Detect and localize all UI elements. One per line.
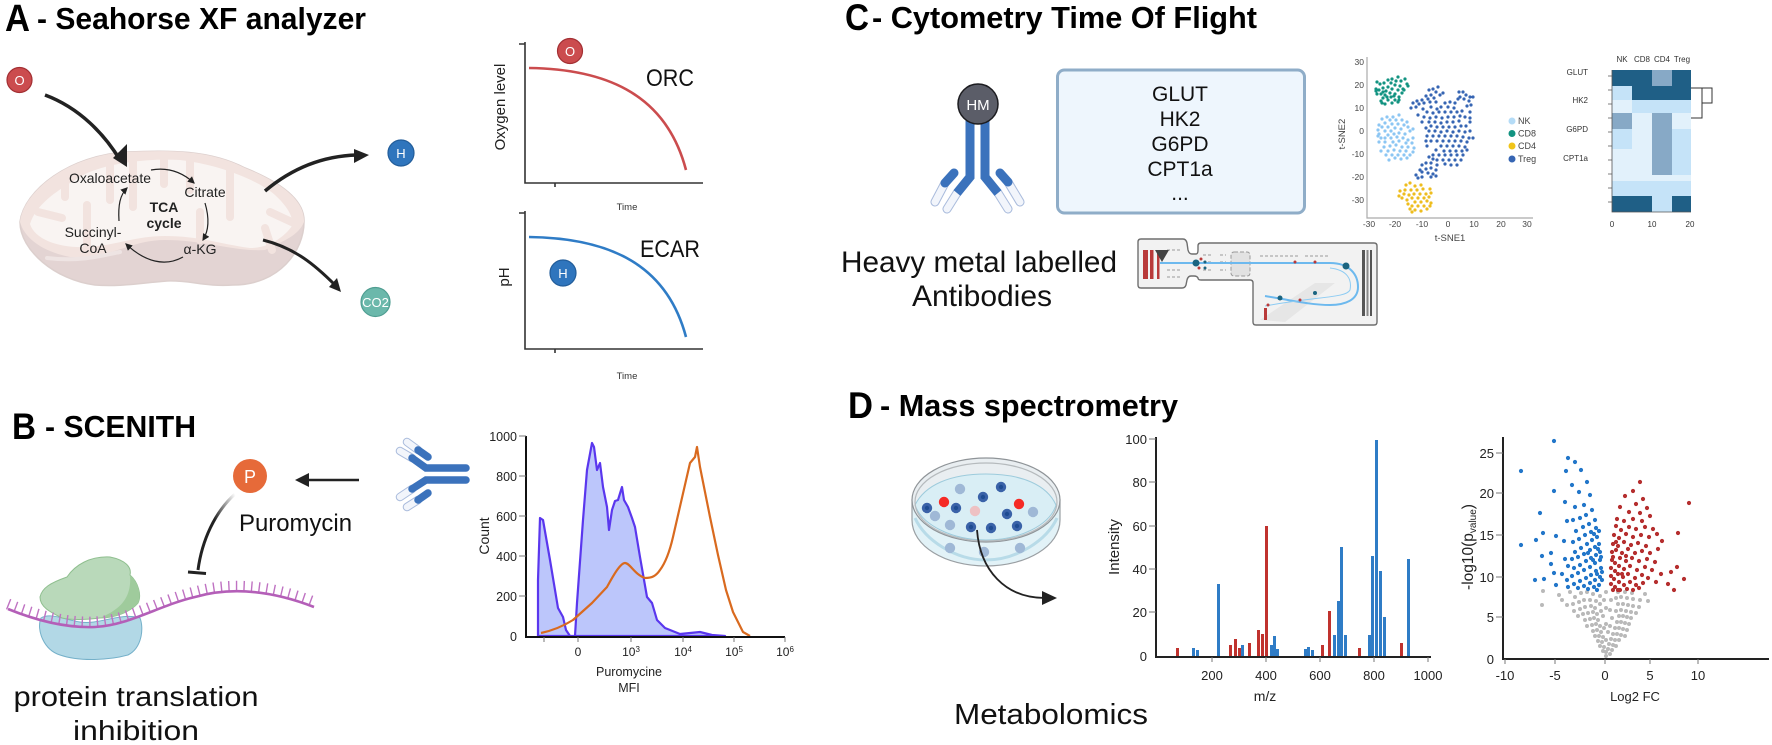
icon: ribosome on mRNA [8, 557, 314, 660]
chart: volcano plot: 5 [1487, 610, 1494, 625]
heading D: - Mass spectrometry [880, 388, 1179, 423]
dots: downregulated [1521, 441, 1602, 590]
chart: volcano plot: -5 [1549, 668, 1561, 683]
chart: mass spectrum: 40 [1133, 562, 1147, 577]
chart: t-SNE scatter: 0 [1446, 219, 1451, 229]
label: heavy metal labelled antibodies: Heavy metal labelled [841, 246, 1117, 279]
heading A: - Seahorse XF analyzer [37, 1, 366, 36]
chart: puromycin MFI histogram: 10 [725, 645, 738, 659]
marker list box: G6PD [1151, 133, 1209, 156]
chart: puromycin MFI histogram: Puromycine [596, 665, 662, 679]
arrow: CO2 out [263, 240, 341, 292]
icon: oxygen molecule [7, 68, 32, 92]
marker list box: HK2 [1160, 108, 1200, 131]
chart: volcano plot: 15 [1480, 528, 1494, 543]
arrow: oxygen into mitochondrion [45, 95, 127, 167]
chart: t-SNE scatter: -20 [1352, 172, 1364, 182]
legend: t-SNE populations: CD8 [1518, 128, 1536, 138]
chart: oxygen level over time [492, 38, 703, 213]
chart: t-SNE scatter: 30 [1355, 57, 1364, 67]
chart: t-SNE scatter: 0 [1359, 126, 1364, 136]
TCA cycle labels and arrows: cycle [146, 215, 182, 231]
chart: marker heatmap: G6PD [1566, 125, 1588, 134]
chart: puromycin MFI histogram: 3 [635, 645, 640, 654]
chart: pH over time [496, 211, 703, 382]
dots: NK cluster [1378, 115, 1414, 160]
icon: CyTOF instrument [1138, 229, 1377, 325]
TCA cycle labels and arrows: Oxaloacetate [69, 170, 151, 186]
chart: mass spectrum: 0 [1140, 649, 1147, 664]
icon: puromycin: P [244, 467, 256, 487]
icon: heavy metal labelled antibody: HM [966, 97, 990, 114]
chart: pH over time: Time [617, 371, 637, 382]
panel C: Cytometry Time Of Flight [841, 0, 1712, 325]
panel A: Seahorse XF analyzer [5, 0, 703, 382]
chart: puromycin MFI histogram: 10 [776, 645, 789, 659]
chart: puromycin MFI histogram: Count [476, 517, 492, 555]
chart: volcano plot: value [1468, 509, 1479, 533]
heading D: D [848, 385, 873, 426]
chart: oxygen level over time: ORC [646, 65, 694, 92]
chart: t-SNE scatter: 10 [1469, 219, 1479, 229]
panel B: SCENITH [8, 406, 794, 745]
chart: t-SNE scatter: 20 [1355, 80, 1364, 90]
chart: mass spectrum: 600 [1309, 668, 1331, 683]
dots: not significant [1542, 591, 1648, 656]
label: heavy metal labelled antibodies [841, 246, 1117, 313]
chart: marker heatmap: GLUT [1567, 68, 1588, 77]
icon: puromycin [233, 459, 267, 493]
chart: mass spectrum: 400 [1255, 668, 1277, 683]
chart: volcano plot: 25 [1480, 446, 1494, 461]
chart: t-SNE scatter: -10 [1352, 149, 1364, 159]
heading B: B [12, 406, 36, 447]
chart: t-SNE scatter: t-SNE1 [1435, 233, 1465, 244]
marker list box: GLUT [1152, 83, 1208, 106]
legend: t-SNE populations: Treg [1518, 154, 1536, 164]
chart: puromycin MFI histogram: 0 [575, 645, 582, 659]
chart: mass spectrum: m/z [1254, 688, 1276, 704]
panel D: Mass spectrometry [848, 385, 1769, 731]
icon: antibody [400, 442, 466, 507]
chart: volcano plot: 0 [1601, 668, 1609, 683]
label: protein translation inhibition: protein translation [14, 681, 258, 712]
icon: CO2 [361, 288, 390, 316]
chart: puromycin MFI histogram: 4 [687, 645, 692, 654]
TCA cycle labels and arrows: Citrate [184, 184, 226, 200]
chart: puromycin MFI histogram: MFI [618, 681, 640, 695]
chart: t-SNE scatter: -30 [1363, 219, 1375, 229]
chart: marker heatmap: CD4 [1654, 55, 1671, 64]
inhibition arrow [188, 494, 235, 574]
chart: mass spectrum: 1000 [1414, 668, 1442, 683]
chart: t-SNE scatter: -30 [1352, 195, 1364, 205]
chart: volcano plot: 10 [1480, 570, 1494, 585]
chart: t-SNE scatter: -10 [1416, 219, 1428, 229]
label: protein translation inhibition [14, 681, 258, 745]
chart: volcano plot: Log2 FC [1610, 689, 1660, 704]
heading B [12, 406, 196, 447]
chart: mass spectrum [1106, 432, 1442, 704]
heading C: - Cytometry Time Of Flight [872, 0, 1257, 35]
icon: CO2: CO2 [362, 295, 389, 310]
chart: puromycin MFI histogram: 600 [496, 510, 517, 524]
dots: CD8 cluster [1376, 77, 1408, 104]
marker list box: CPT1a [1147, 158, 1213, 181]
arrow: antibody to puromycin [295, 473, 359, 487]
chart: marker heatmap: NK [1616, 55, 1628, 64]
chart: volcano plot: 5 [1646, 668, 1654, 683]
chart: pH over time: ECAR [640, 236, 700, 263]
icon: proton: H [396, 146, 406, 161]
chart: volcano plot: ) [1460, 504, 1477, 509]
chart: marker heatmap: CD8 [1634, 55, 1651, 64]
dots: Treg cluster [1411, 87, 1473, 178]
chart: puromycin MFI histogram: 10 [622, 645, 635, 659]
dots: CD4 cluster [1399, 183, 1431, 212]
label: metabolomics: Metabolomics [954, 699, 1148, 731]
chart: marker heatmap: HK2 [1572, 96, 1589, 105]
chart: t-SNE scatter: t-SNE2 [1337, 119, 1348, 149]
chart: oxygen level over time: Oxygen level [492, 64, 509, 150]
chart: puromycin MFI histogram: 800 [496, 470, 517, 484]
icon: petri dish with cells [912, 458, 1060, 566]
TCA cycle labels and arrows: α-KG [184, 241, 216, 257]
chart: mass spectrum: 80 [1133, 475, 1147, 490]
marker list box [1058, 70, 1304, 213]
TCA cycle labels and arrows: TCA [150, 199, 178, 215]
chart: marker heatmap [1563, 55, 1712, 229]
icon: proton [388, 140, 414, 166]
chart: volcano plot [1460, 437, 1769, 704]
chart: marker heatmap: 0 [1610, 220, 1615, 229]
legend: t-SNE populations [1508, 116, 1536, 164]
chart: pH over time: pH [496, 267, 513, 287]
chart: volcano plot: 20 [1480, 486, 1494, 501]
chart: puromycin MFI histogram: 1000 [489, 430, 517, 444]
icon: mitochondrion [20, 151, 304, 286]
chart: marker heatmap: Treg [1674, 55, 1690, 64]
chart: volcano plot: -10 [1496, 668, 1514, 683]
chart: marker heatmap: 10 [1648, 220, 1657, 229]
chart: puromycin MFI histogram: 200 [496, 590, 517, 604]
chart: mass spectrum: 200 [1201, 668, 1223, 683]
arrow: protons out [265, 149, 369, 191]
chart: volcano plot: -log10(p [1460, 533, 1477, 590]
label: puromycin: Puromycin [239, 510, 352, 537]
arrow: dish to spectrum [977, 530, 1057, 605]
label: heavy metal labelled antibodies: Antibodies [912, 280, 1052, 313]
chart: puromycin MFI histogram: 10 [674, 645, 687, 659]
chart: t-SNE scatter: 30 [1522, 219, 1532, 229]
heading B: - SCENITH [45, 409, 196, 444]
TCA cycle labels and arrows [65, 169, 226, 262]
chart: t-SNE scatter: -20 [1389, 219, 1401, 229]
chart: marker heatmap: 20 [1686, 220, 1695, 229]
dots: upregulated [1611, 482, 1689, 590]
chart: mass spectrum: Intensity [1106, 519, 1123, 575]
chart: t-SNE scatter: 10 [1355, 103, 1364, 113]
chart: t-SNE scatter: 20 [1496, 219, 1506, 229]
icon: oxygen molecule: O [14, 73, 25, 88]
icon: heavy metal labelled antibody [935, 84, 1020, 209]
chart: puromycin MFI histogram: 5 [738, 645, 743, 654]
chart: puromycin MFI histogram: 6 [789, 645, 794, 654]
chart: mass spectrum: 20 [1133, 605, 1147, 620]
chart: oxygen level over time: O [565, 44, 575, 59]
chart: t-SNE scatter [1337, 57, 1536, 244]
chart: mass spectrum: 100 [1125, 432, 1147, 447]
TCA cycle labels and arrows: CoA [79, 240, 107, 256]
chart: puromycin MFI histogram [476, 430, 794, 695]
legend: t-SNE populations: NK [1518, 116, 1531, 126]
marker list box: ... [1171, 182, 1189, 205]
chart: mass spectrum: 800 [1363, 668, 1385, 683]
chart: puromycin MFI histogram: 400 [496, 550, 517, 564]
chart: marker heatmap: CPT1a [1563, 154, 1589, 163]
chart: mass spectrum: 60 [1133, 519, 1147, 534]
chart: oxygen level over time: Time [617, 202, 637, 213]
chart: volcano plot: 10 [1691, 668, 1705, 683]
TCA cycle labels and arrows: Succinyl- [65, 224, 122, 240]
chart: pH over time: H [558, 266, 568, 281]
legend: t-SNE populations: CD4 [1518, 141, 1536, 151]
chart: puromycin MFI histogram: 0 [510, 630, 517, 644]
chart: volcano plot: 0 [1487, 652, 1494, 667]
